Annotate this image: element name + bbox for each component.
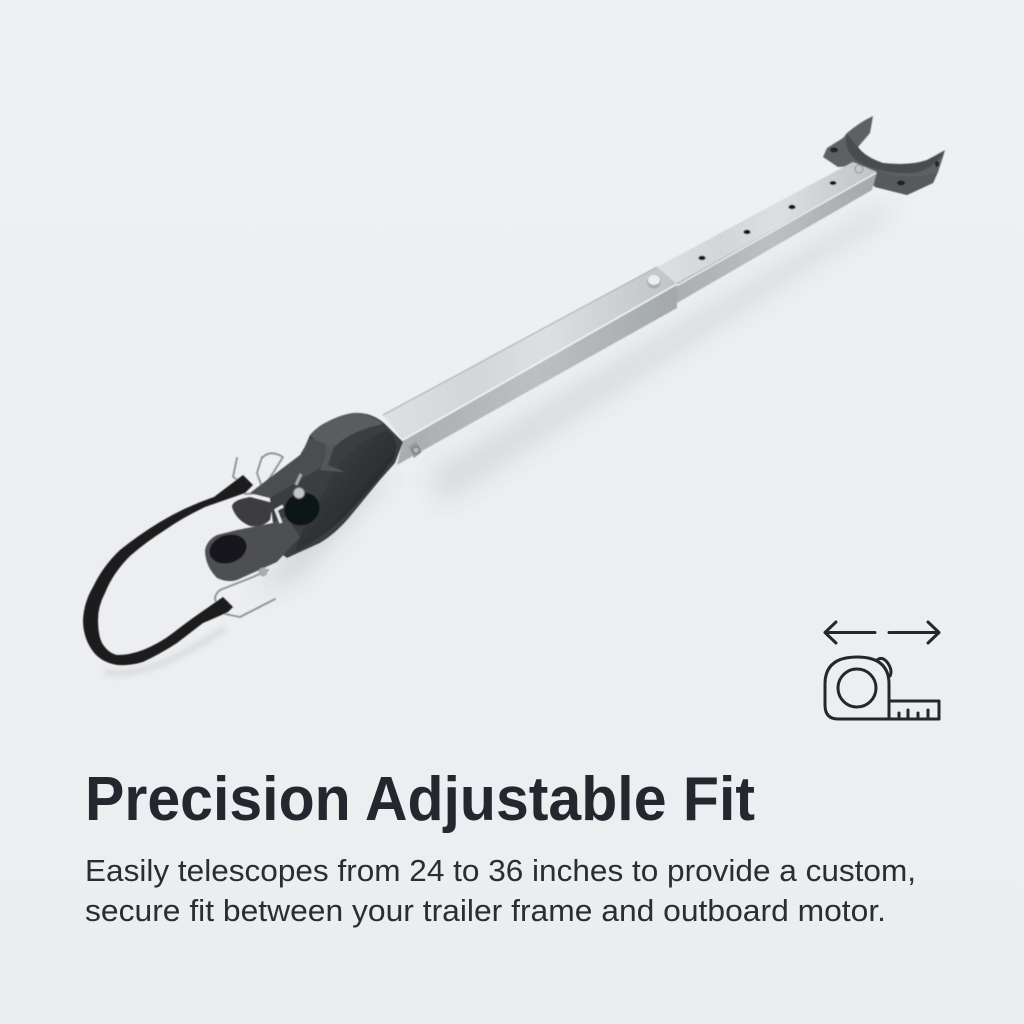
socket opening — [279, 487, 325, 531]
locking pin — [647, 276, 661, 288]
inner tube — [655, 162, 877, 303]
upper socket — [232, 497, 273, 526]
end rivet — [855, 165, 863, 173]
title: Precision Adjustable Fit — [85, 765, 755, 834]
wing bolt — [294, 488, 304, 498]
icon: right arrow — [889, 622, 939, 643]
description — [85, 853, 916, 928]
rubber strap — [83, 475, 253, 665]
product: telescoping transom saver — [83, 116, 945, 673]
description line 1: Easily telescopes from 24 to 36 inches to provide a custom, — [85, 853, 916, 888]
icon: left arrow — [825, 622, 875, 643]
description line 2: secure fit between your trailer frame and outboard motor. — [85, 893, 886, 928]
upper arm — [250, 438, 327, 498]
icon: tape blade — [889, 701, 939, 719]
icon: measuring tape with arrows — [825, 622, 939, 719]
lower bolt — [258, 568, 268, 576]
mounting bracket — [823, 116, 945, 195]
adjustment holes — [698, 181, 836, 260]
lower end cap — [206, 530, 250, 568]
outer tube — [383, 267, 677, 465]
icon: tape reel — [838, 669, 876, 707]
icon: tape button — [877, 658, 891, 676]
bracket fin — [320, 443, 345, 472]
lower arm — [205, 517, 300, 581]
shadow under product — [105, 205, 892, 673]
wire hooks — [215, 453, 283, 617]
hitch housing — [205, 413, 403, 581]
side bolt — [408, 441, 422, 458]
icon: tape body — [825, 657, 889, 719]
icon: tape ticks — [899, 710, 928, 719]
white clip — [276, 506, 283, 523]
